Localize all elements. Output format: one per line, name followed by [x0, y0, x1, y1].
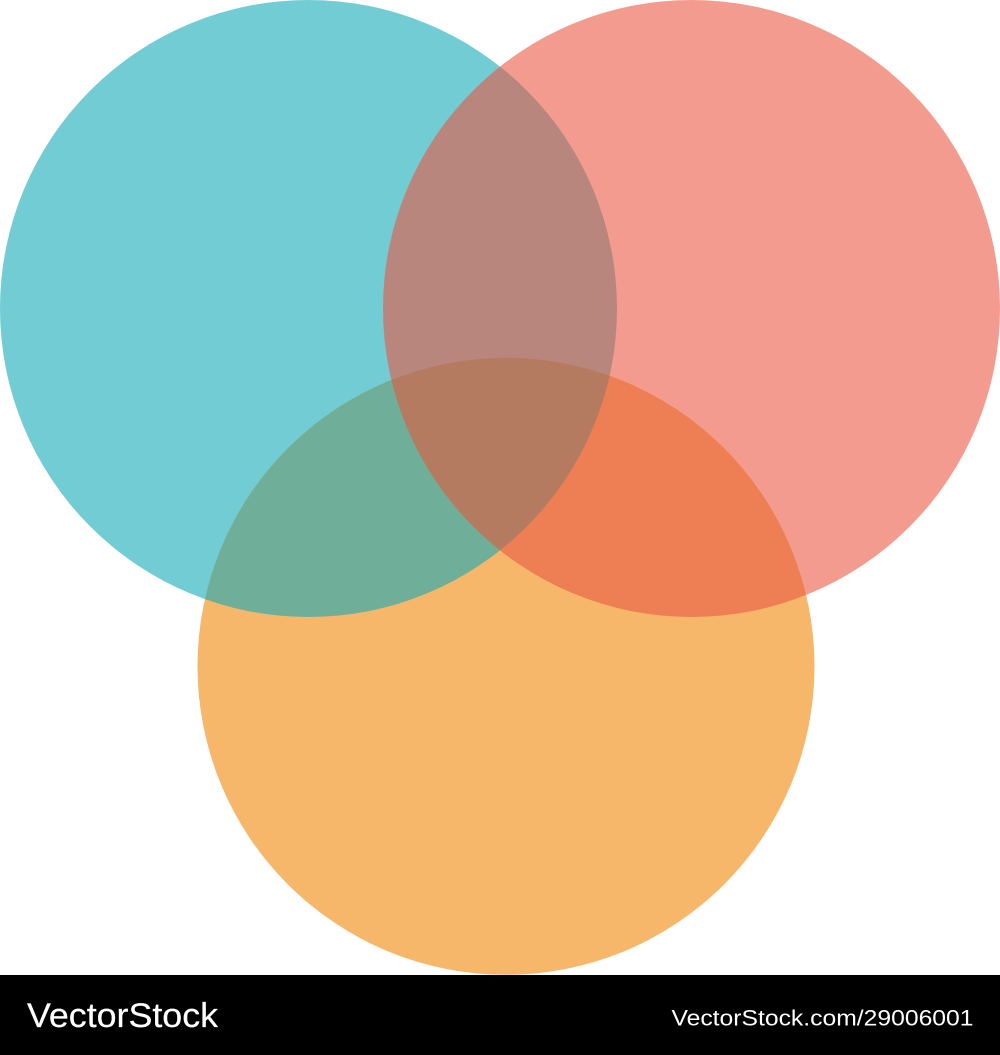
circle: orange	[198, 358, 814, 975]
circle: salmon	[383, 0, 1000, 617]
watermark footer bar	[0, 975, 1000, 1055]
overlap: teal and orange	[205, 358, 608, 617]
circle: teal	[0, 0, 617, 617]
brand name: VectorStock	[27, 997, 219, 1035]
overlap: salmon and orange	[392, 358, 806, 617]
overlap: all three circles	[392, 358, 610, 550]
overlap: teal and salmon	[383, 66, 617, 380]
image url: VectorStock.com/29006001	[672, 1006, 974, 1031]
